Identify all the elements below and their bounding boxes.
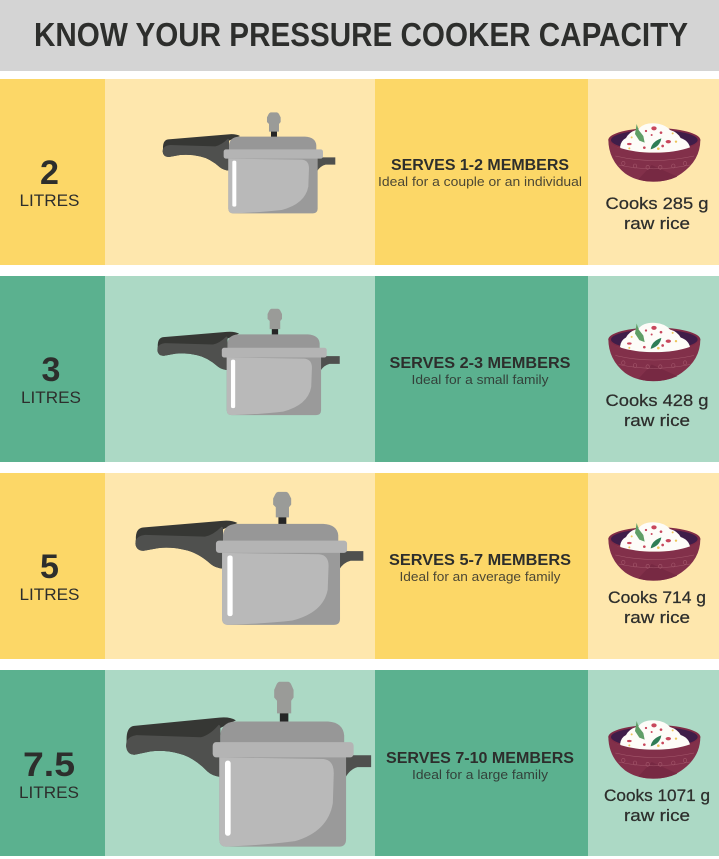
icon: 7.5 litre pressure cooker [126, 682, 371, 847]
row: 2 litres [0, 79, 719, 265]
capacity: 5 litres: 5 [40, 548, 59, 586]
row: 7.5 litres [0, 670, 719, 856]
capacity: 5 litres: LITRES [20, 585, 80, 604]
capacity: 3 litres: LITRES [21, 388, 81, 407]
icon: rice bowl [608, 720, 700, 779]
serves 7-10 members text: Ideal for a large family [412, 768, 549, 782]
serves 5-7 members text: Ideal for an average family [400, 570, 561, 584]
icon: 3 litre pressure cooker [157, 309, 340, 415]
capacity: 7.5 litres [19, 746, 79, 802]
icon: rice bowl [608, 522, 700, 581]
rice quantity 428 g: raw rice [624, 411, 690, 430]
rice quantity 285 g: Cooks 285 g [606, 194, 708, 213]
serves 2-3 members text: Ideal for a small family [412, 373, 549, 387]
icon: 2 litre pressure cooker [163, 112, 335, 213]
icon: rice bowl [608, 323, 700, 381]
serves 1-2 members text: Ideal for a couple or an individual [378, 175, 582, 189]
title banner [0, 0, 719, 71]
capacity: 2 litres: 2 [40, 154, 59, 192]
icon: rice bowl [608, 123, 700, 182]
serves 1-2 members text: SERVES 1-2 MEMBERS [391, 157, 569, 174]
rice quantity 714 g [608, 588, 706, 627]
serves 7-10 members text: SERVES 7-10 MEMBERS [386, 750, 574, 767]
capacity: 2 litres: LITRES [20, 191, 80, 210]
serves 1-2 members text [378, 157, 582, 189]
capacity: 7.5 litres: LITRES [19, 783, 79, 802]
rice quantity 285 g: raw rice [624, 214, 690, 233]
capacity: 2 litres [20, 154, 80, 210]
rice quantity 1071 g [604, 786, 710, 825]
capacity: 3 litres [21, 351, 81, 407]
capacity: 5 litres [20, 548, 80, 604]
row: 3 litres [0, 276, 719, 462]
rice quantity 285 g [606, 194, 708, 233]
rice quantity 428 g: Cooks 428 g [606, 391, 708, 410]
rice quantity 428 g [606, 391, 708, 430]
serves 7-10 members text [386, 750, 574, 782]
serves 2-3 members text [390, 355, 570, 387]
serves 5-7 members text: SERVES 5-7 MEMBERS [389, 552, 571, 569]
rice quantity 1071 g: raw rice [624, 806, 690, 825]
rice quantity 714 g: Cooks 714 g [608, 588, 706, 607]
row: 5 litres [0, 473, 719, 659]
serves 5-7 members text [389, 552, 571, 584]
capacity: 3 litres: 3 [42, 351, 60, 389]
capacity: 7.5 litres: 7.5 [23, 746, 75, 784]
icon: 5 litre pressure cooker [135, 492, 363, 625]
rice quantity 1071 g: Cooks 1071 g [604, 786, 710, 805]
rice quantity 714 g: raw rice [624, 608, 690, 627]
serves 2-3 members text: SERVES 2-3 MEMBERS [390, 355, 570, 372]
